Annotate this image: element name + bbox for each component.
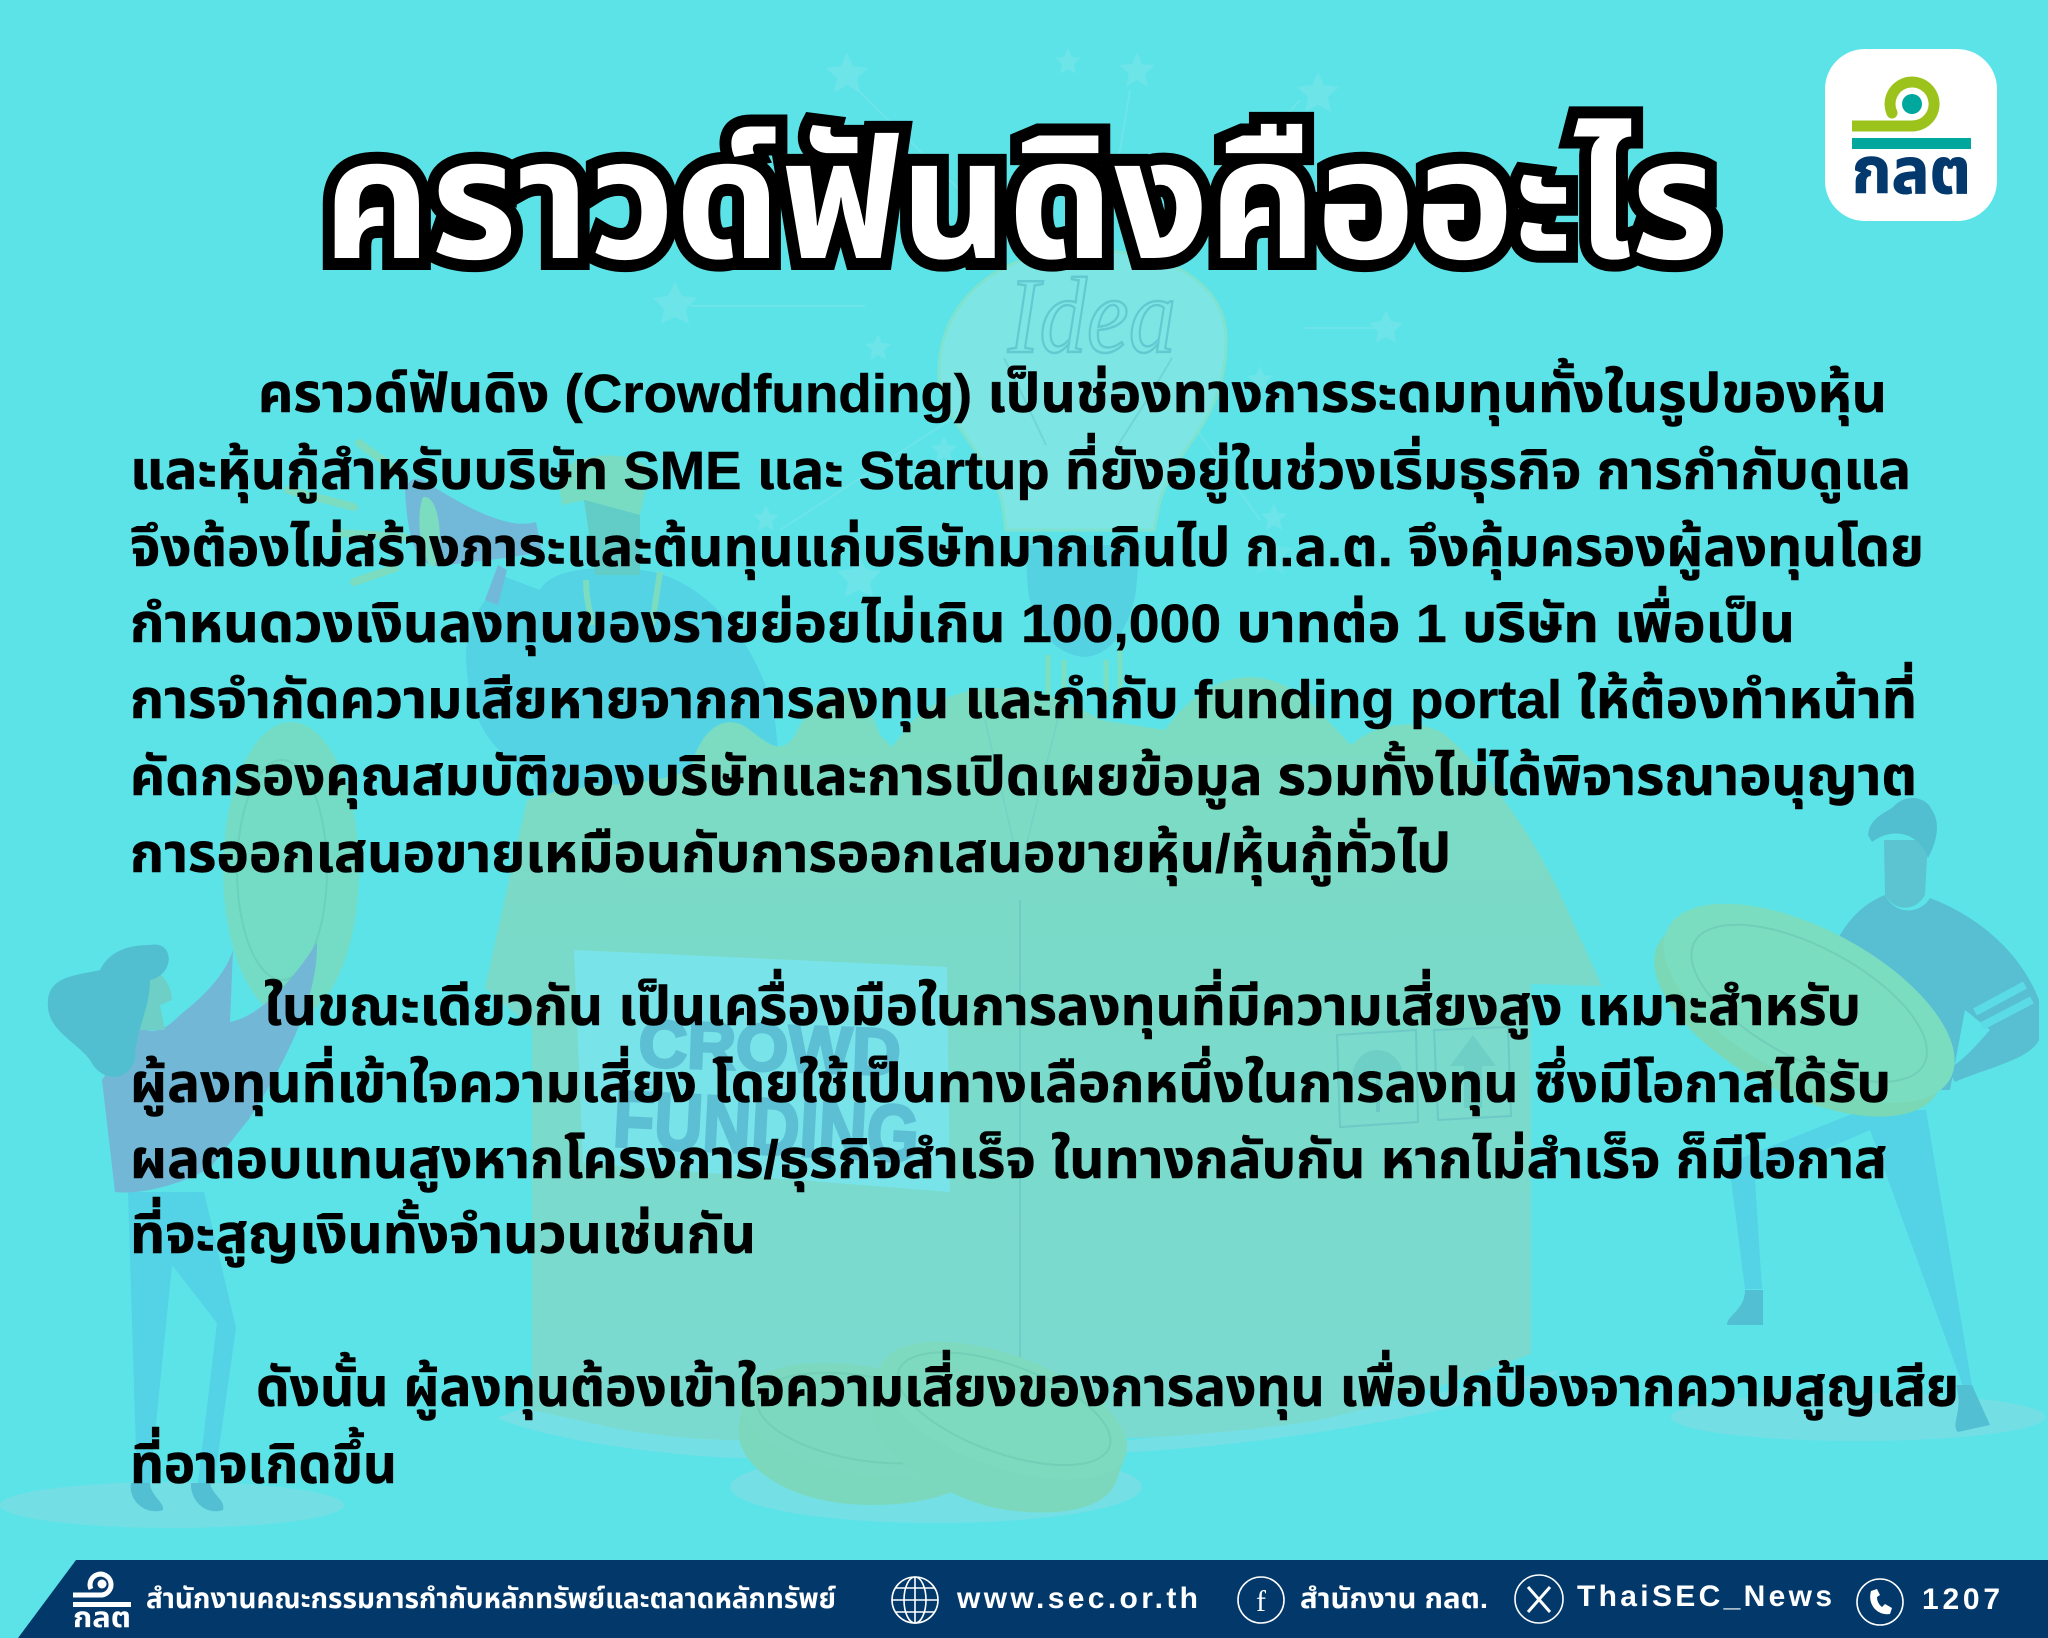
body paragraph 1: การจำกัดความเสียหายจากการลงทุน และกำกับ funding portal ให้ต้องทำหน้าที่	[130, 662, 1917, 732]
body paragraph 1: คราวด์ฟันดิง (Crowdfunding) เป็นช่องทางการระดมทุนทั้งในรูปของหุ้น	[258, 358, 1887, 426]
illustration: megaphone person	[288, 443, 783, 800]
icon: X	[1515, 1575, 1563, 1623]
x account: ThaiSEC_News	[1577, 1580, 1832, 1613]
illustration: cardboard box	[485, 677, 1602, 1458]
hotline: 1207	[1922, 1583, 2000, 1616]
footer logo: กลต	[73, 1602, 131, 1633]
icon: globe	[892, 1577, 938, 1623]
footer agency name: สำนักงานคณะกรรมการกำกับหลักทรัพย์และตลาดหลักทรัพย์	[146, 1583, 836, 1614]
logo: SEC Thailand	[1825, 49, 1997, 221]
box label	[574, 950, 950, 1192]
shirt	[102, 942, 317, 1193]
body paragraph 1	[130, 358, 1924, 886]
illustration: stacked coins	[725, 1314, 1145, 1545]
illustration: light bulb	[939, 250, 1226, 710]
body paragraph 1: กำหนดวงเงินลงทุนของรายย่อยไม่เกิน 100,000 บาทต่อ 1 บริษัท เพื่อเป็น	[130, 586, 1795, 656]
shirt	[1819, 895, 2039, 1090]
box stickers	[1337, 1027, 1511, 1127]
legs	[1729, 1110, 1972, 1386]
logo wordmark: กลต	[1852, 135, 1971, 207]
body paragraph 1: จึงต้องไม่สร้างภาระและต้นทุนแก่บริษัทมากเกินไป ก.ล.ต. จึงคุ้มครองผู้ลงทุนโดย	[130, 518, 1924, 580]
website: www.sec.or.th	[956, 1582, 1198, 1615]
box shadow	[497, 1370, 1560, 1458]
illustration: stars and rays	[653, 48, 1403, 597]
body paragraph 3: ที่อาจเกิดขึ้น	[130, 1427, 397, 1495]
logo swirl	[1852, 82, 1934, 126]
person torso	[466, 568, 783, 800]
legs	[128, 1192, 236, 1483]
body paragraph 2: ในขณะเดียวกัน เป็นเครื่องมือในการลงทุนที่มีความเสี่ยงสูง เหมาะสำหรับ	[264, 969, 1861, 1039]
body paragraph 2: ผลตอบแทนสูงหากโครงการ/ธุรกิจสำเร็จ ในทางกลับกัน หากไม่สำเร็จ ก็มีโอกาส	[130, 1130, 1887, 1192]
footer bar	[18, 1560, 2048, 1638]
body paragraph 3: ดังนั้น ผู้ลงทุนต้องเข้าใจความเสี่ยงของการลงทุน เพื่อปกป้องจากความสูญเสีย	[256, 1350, 1959, 1420]
body paragraph 1: และหุ้นกู้สำหรับบริษัท SME และ Startup ที่ยังอยู่ในช่วงเริ่มธุรกิจ การกำกับดูแล	[130, 433, 1911, 503]
footer logo	[73, 1574, 131, 1633]
body paragraph 2	[130, 969, 1891, 1267]
icon: facebook	[1238, 1577, 1284, 1623]
box label: FUNDING	[611, 1074, 921, 1179]
facebook page: สำนักงาน กลต.	[1300, 1583, 1488, 1614]
box label: CROWD	[638, 1006, 902, 1089]
held coin	[223, 722, 359, 1018]
box seam	[1019, 900, 1021, 1370]
icon: phone	[1857, 1579, 1903, 1625]
bulb base	[1025, 545, 1140, 657]
body paragraph 1: คัดกรองคุณสมบัติของบริษัทและการเปิดเผยข้อมูล รวมทั้งไม่ได้พิจารณาอนุญาต	[130, 741, 1917, 809]
bulb idea lettering: Idea	[1007, 257, 1176, 376]
illustration: man holding coin	[1624, 798, 2045, 1441]
held coin	[1624, 862, 1985, 1160]
illustration: woman holding coin	[0, 722, 359, 1528]
body paragraph 3	[130, 1350, 1959, 1495]
body paragraph 2: ผู้ลงทุนที่เข้าใจความเสี่ยง โดยใช้เป็นทางเลือกหนึ่งในการลงทุน ซึ่งมีโอกาสได้รับ	[130, 1046, 1891, 1116]
body paragraph 2: ที่จะสูญเงินทั้งจำนวนเช่นกัน	[130, 1197, 756, 1267]
body paragraph 1: การออกเสนอขายเหมือนกับการออกเสนอขายหุ้น/หุ้นกู้ทั่วไป	[130, 818, 1451, 886]
icon: facebook: f	[1256, 1585, 1266, 1618]
title: คราวด์ฟันดิงคืออะไร	[323, 106, 1717, 294]
